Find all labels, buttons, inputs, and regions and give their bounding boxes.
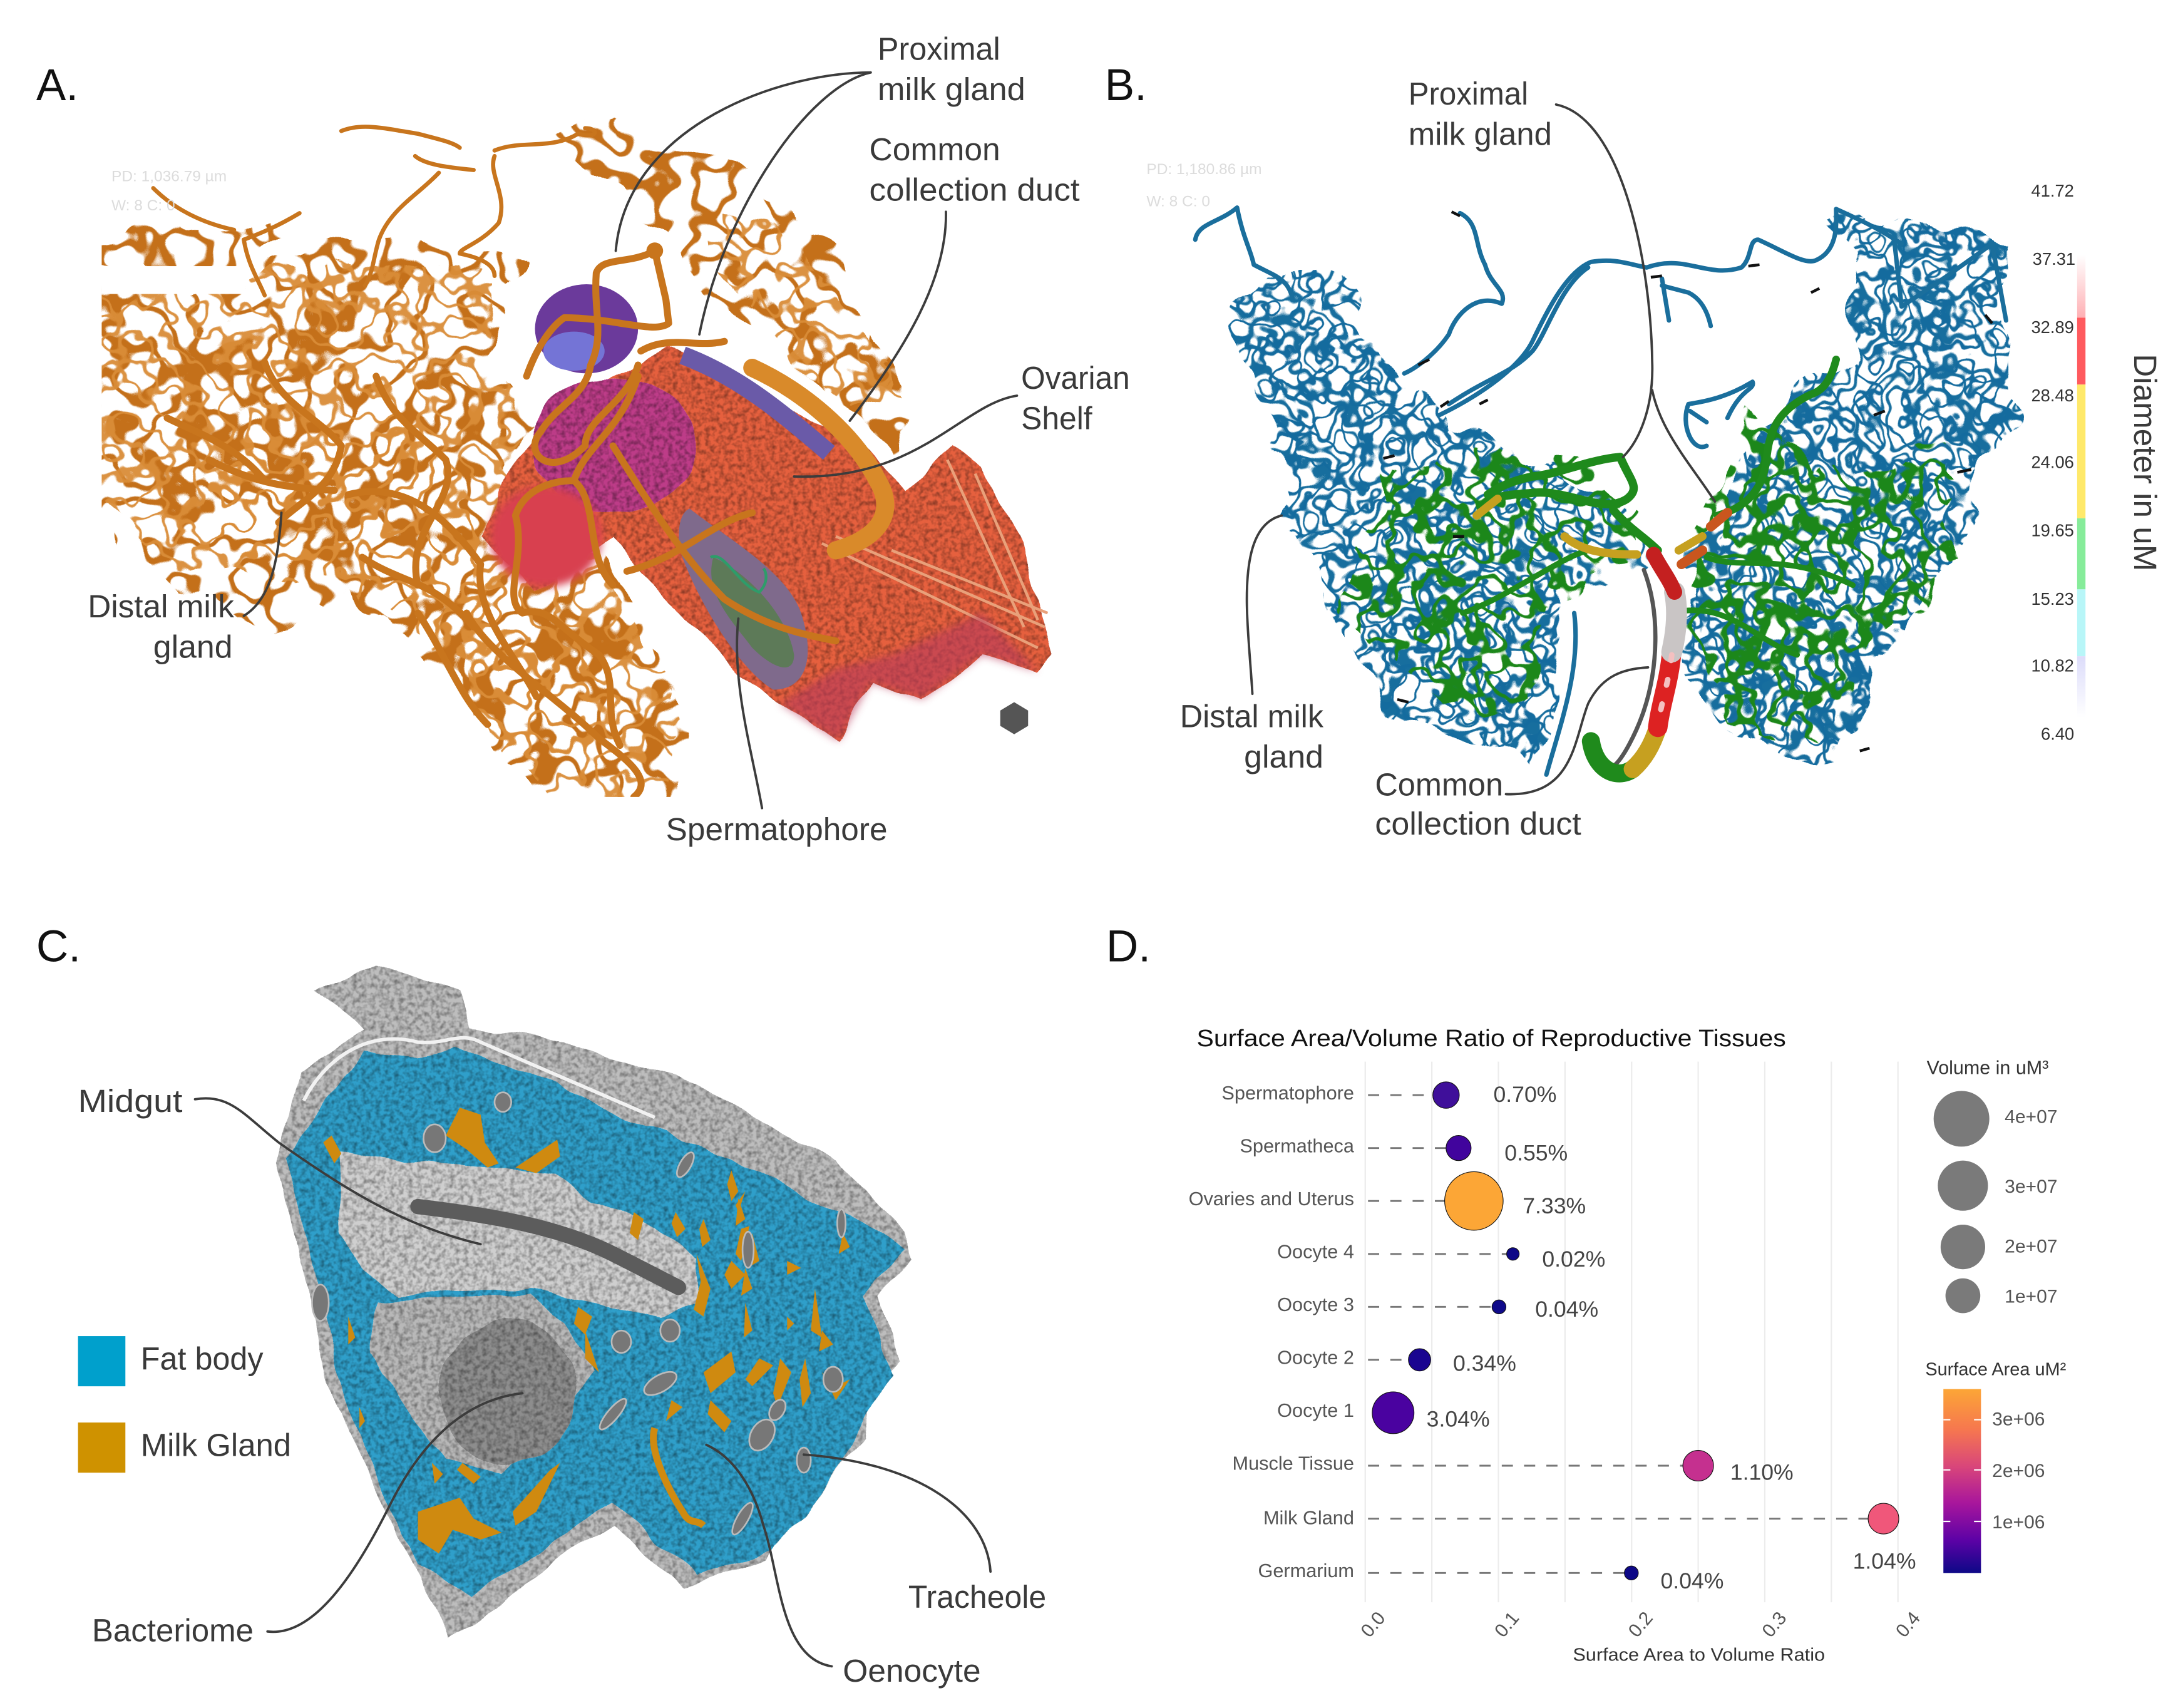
body: red-orange muscle and ovarian mass	[481, 348, 1055, 741]
labels B: Proximal	[1409, 76, 1528, 111]
labels A: Common	[870, 131, 1000, 167]
viewer overlay text: PD: 1,180.86 µm	[1146, 161, 1262, 178]
legend: tissue colours	[78, 1336, 291, 1473]
scale values: 24.06	[2031, 453, 2074, 472]
scale values: 15.23	[2031, 589, 2074, 609]
labels B	[1180, 76, 1581, 841]
grey cuticle outer shape	[276, 964, 913, 1641]
x axis ticks	[1357, 1608, 1924, 1641]
purple band along collection duct	[682, 355, 829, 453]
scale values: 37.31	[2033, 249, 2075, 269]
volume size legend: 3e+07	[2005, 1176, 2058, 1197]
panel letter A: A.	[36, 61, 78, 110]
viewer overlay text: PD: 1,036.79 µm	[111, 168, 227, 185]
chart title: Surface Area/Volume Ratio of Reproductive Tissues	[1197, 1026, 1786, 1052]
x axis ticks: 0.3	[1758, 1608, 1791, 1641]
percentage labels: 7.33%	[1523, 1193, 1586, 1218]
legend: tissue colours: Fat body	[141, 1340, 264, 1376]
green medium branches	[1337, 359, 1958, 738]
anterior red region	[490, 486, 602, 587]
percentage labels: 0.04%	[1661, 1568, 1723, 1593]
percentage labels	[1427, 1082, 1916, 1593]
green rim in spermatophore	[711, 557, 766, 592]
labels A: Proximal	[878, 31, 1000, 67]
x axis ticks: 0.0	[1357, 1608, 1390, 1641]
scale title: Diameter in uM	[2127, 354, 2163, 571]
row labels: Spermatheca	[1240, 1134, 1355, 1156]
labels B: Distal milk	[1180, 699, 1323, 734]
midgut	[341, 1154, 699, 1318]
distal milk gland tubule network	[69, 118, 927, 822]
labels C	[78, 1083, 1046, 1689]
labels A: gland	[153, 629, 233, 664]
lollipop dots	[1372, 1082, 1899, 1580]
surface area colour legend: Surface Area uM²	[1925, 1359, 2067, 1379]
percentage labels: 1.10%	[1730, 1459, 1794, 1484]
labels B: collection duct	[1375, 806, 1581, 841]
percentage labels: 0.02%	[1542, 1247, 1605, 1272]
labels A	[88, 31, 1130, 847]
labels A: Shelf	[1021, 400, 1092, 436]
panel B: milk gland diameter map	[1105, 61, 2163, 841]
surface area colour legend: 2e+06	[1992, 1461, 2045, 1481]
x axis ticks: 0.2	[1625, 1608, 1657, 1641]
volume size legend: 1e+07	[2005, 1287, 2058, 1307]
fat body blue region	[285, 1046, 905, 1595]
icon: orientation cube	[1000, 702, 1028, 734]
row labels: Oocyte 2	[1277, 1347, 1354, 1369]
common collection duct	[752, 368, 885, 550]
white cut strip in the volume crop	[101, 266, 245, 294]
row labels: Oocyte 1	[1277, 1399, 1354, 1421]
spermatophore capsule	[679, 508, 808, 690]
labels A: Distal milk	[88, 589, 234, 624]
labels A: milk gland	[878, 71, 1025, 107]
leader lines C	[195, 1098, 990, 1666]
viewer overlay text: W: 8 C: 0	[1146, 193, 1210, 210]
legend: tissue colours: Milk Gland	[141, 1427, 291, 1463]
scale values: 19.65	[2031, 521, 2074, 540]
viewer overlay text	[1146, 161, 1262, 210]
row labels: Ovaries and Uterus	[1189, 1188, 1354, 1210]
blue long strands	[1195, 208, 2006, 774]
dashed stems	[1368, 1095, 1869, 1573]
panel letter C: C.	[36, 922, 81, 971]
purple spermatheca dome	[535, 284, 638, 373]
volume size legend: 4e+07	[2005, 1107, 2058, 1128]
lower magenta fringe	[780, 613, 1038, 741]
labels C: Midgut	[78, 1083, 183, 1119]
blue fine tubule networks	[1226, 209, 2009, 773]
proximal milk gland thick ducts	[514, 242, 885, 746]
scale values: 6.40	[2041, 724, 2074, 744]
percentage labels: 0.55%	[1504, 1141, 1568, 1166]
labels C: Tracheole	[908, 1579, 1046, 1615]
panel C: cross-section with fat body and milk gland	[36, 922, 1046, 1689]
labels A: Ovarian	[1021, 360, 1130, 396]
scale values: 32.89	[2031, 317, 2074, 337]
posterior muscle fibres	[822, 460, 1047, 648]
labels B: gland	[1244, 739, 1323, 774]
row labels: Oocyte 3	[1277, 1294, 1354, 1315]
row labels: Germarium	[1258, 1560, 1354, 1582]
spermatophore interior	[711, 557, 794, 667]
milk gland orange patches	[323, 1108, 850, 1553]
percentage labels: 0.70%	[1493, 1082, 1556, 1107]
oval tracheae and oenocytes	[312, 1093, 846, 1537]
row labels: Milk Gland	[1263, 1506, 1354, 1528]
black tubule specks	[1384, 212, 1992, 751]
percentage labels: 1.04%	[1853, 1549, 1916, 1574]
grid lines	[1365, 1062, 1898, 1602]
white gap above fat body	[304, 1038, 655, 1118]
labels A: collection duct	[870, 172, 1080, 207]
leader lines A	[244, 73, 1017, 808]
panel letter D: D.	[1106, 922, 1151, 971]
tissue body	[481, 284, 1055, 741]
blue lobe	[543, 332, 605, 371]
panel D: surface area to volume chart	[1106, 922, 2067, 1665]
surface area colour legend	[1925, 1359, 2067, 1573]
surface area colour legend: 1e+06	[1992, 1512, 2045, 1533]
bacteriome	[369, 1296, 592, 1474]
labels B: milk gland	[1409, 116, 1552, 152]
volume size legend: 2e+07	[2005, 1237, 2058, 1257]
leader lines B	[1247, 105, 1715, 795]
diameter colour scale	[2031, 181, 2085, 744]
labels A: Spermatophore	[666, 811, 887, 847]
percentage labels: 0.04%	[1535, 1297, 1598, 1322]
oocyte: magenta region	[530, 379, 697, 513]
viewer overlay text: W: 8 C: 0	[111, 197, 175, 214]
scale values: 28.48	[2031, 386, 2074, 405]
scale values	[2031, 181, 2075, 744]
x axis ticks: 0.4	[1892, 1608, 1924, 1641]
panel A: 3D render of milk gland and reproductive tract	[36, 31, 1130, 847]
row labels	[1189, 1082, 1355, 1582]
labels C: Oenocyte	[843, 1653, 981, 1689]
row labels: Spermatophore	[1221, 1082, 1354, 1104]
panel letter B: B.	[1105, 61, 1147, 110]
x axis ticks: 0.1	[1491, 1608, 1523, 1641]
labels C: Bacteriome	[92, 1612, 254, 1648]
volume size legend: Volume in uM³	[1927, 1057, 2048, 1079]
row labels: Oocyte 4	[1277, 1240, 1354, 1262]
labels B: Common	[1375, 767, 1503, 803]
surface area colour legend: 3e+06	[1992, 1409, 2045, 1429]
volume size legend	[1927, 1057, 2058, 1313]
viewer overlay text	[111, 168, 227, 214]
row labels: Muscle Tissue	[1233, 1453, 1354, 1474]
x axis title: Surface Area to Volume Ratio	[1573, 1645, 1825, 1665]
common collection duct coloured by diameter	[1591, 555, 1677, 773]
scale values: 41.72	[2031, 181, 2074, 200]
percentage labels: 0.34%	[1453, 1351, 1516, 1376]
scale values: 10.82	[2031, 656, 2074, 676]
percentage labels: 3.04%	[1427, 1407, 1490, 1432]
